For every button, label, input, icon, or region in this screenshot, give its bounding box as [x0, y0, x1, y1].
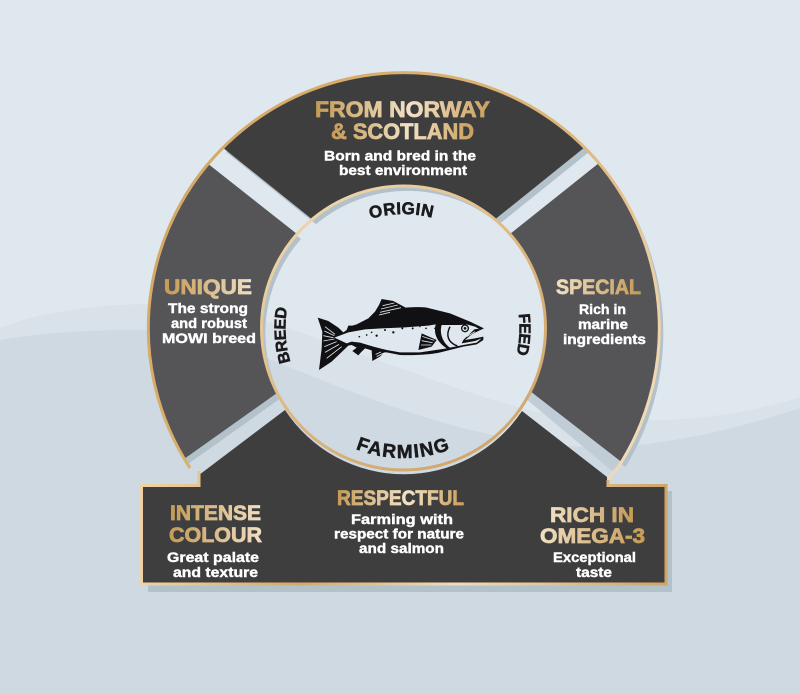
text: farming with respect	[334, 512, 465, 556]
text: great palate	[167, 550, 260, 580]
text: great palate: Great palate	[167, 550, 260, 565]
text: marine ingredients: marine	[578, 317, 629, 332]
curved label: origin: ORIGIN	[369, 202, 434, 218]
heading: from norway and scotland: FROM NORWAY	[315, 97, 490, 122]
text: exceptional taste	[553, 550, 636, 580]
ring segment: breed	[147, 163, 297, 459]
heading: intense colour	[169, 502, 262, 547]
heading: rich in omega-3	[540, 504, 645, 548]
base panel: farming	[142, 410, 665, 583]
ring segment: feed	[510, 163, 659, 462]
heading: intense colour: INTENSE	[170, 502, 261, 525]
heading: rich in omega-3: OMEGA-3	[540, 525, 645, 548]
heading: rich in omega-3: RICH IN	[550, 504, 634, 527]
curved label: feed: FEED	[517, 314, 531, 356]
curved label: farming: FARMING	[356, 436, 448, 458]
icon: salmon	[318, 299, 484, 370]
text: marine ingredients	[563, 302, 646, 347]
drop shadow of the ring and base	[148, 77, 672, 592]
heading: intense colour: COLOUR	[169, 524, 262, 547]
text: farming with respect: and salmon	[359, 541, 444, 556]
text: mowi breed: MOWI breed	[162, 331, 256, 346]
outer gold ring	[148, 73, 659, 485]
text: mowi breed	[162, 301, 256, 346]
text: great palate: and texture	[173, 565, 259, 580]
text: exceptional taste: taste	[576, 565, 613, 580]
text: marine ingredients: ingredients	[563, 332, 646, 347]
heading: unique: UNIQUE	[164, 276, 252, 299]
text: farming with respect: respect for nature	[334, 526, 465, 542]
text: born and bred	[324, 148, 477, 178]
text: mowi breed: The strong	[168, 301, 248, 316]
heading: respectful: RESPECTFUL	[337, 487, 464, 510]
gold base frame	[142, 471, 666, 584]
heading: special: SPECIAL	[556, 276, 641, 299]
text: exceptional taste: Exceptional	[553, 550, 636, 565]
heading: from norway and scotland	[315, 97, 490, 144]
text: born and bred: Born and bred in the	[324, 148, 477, 164]
curved label: breed: BREED	[274, 307, 290, 364]
text: mowi breed: and robust	[171, 316, 248, 331]
inner gold circle	[262, 186, 546, 470]
text: marine ingredients: Rich in	[579, 302, 626, 317]
ring segment: origin	[222, 72, 585, 219]
text: farming with respect: Farming with	[351, 512, 453, 527]
text: born and bred: best environment	[339, 163, 468, 178]
heading: from norway and scotland: & SCOTLAND	[331, 119, 474, 144]
